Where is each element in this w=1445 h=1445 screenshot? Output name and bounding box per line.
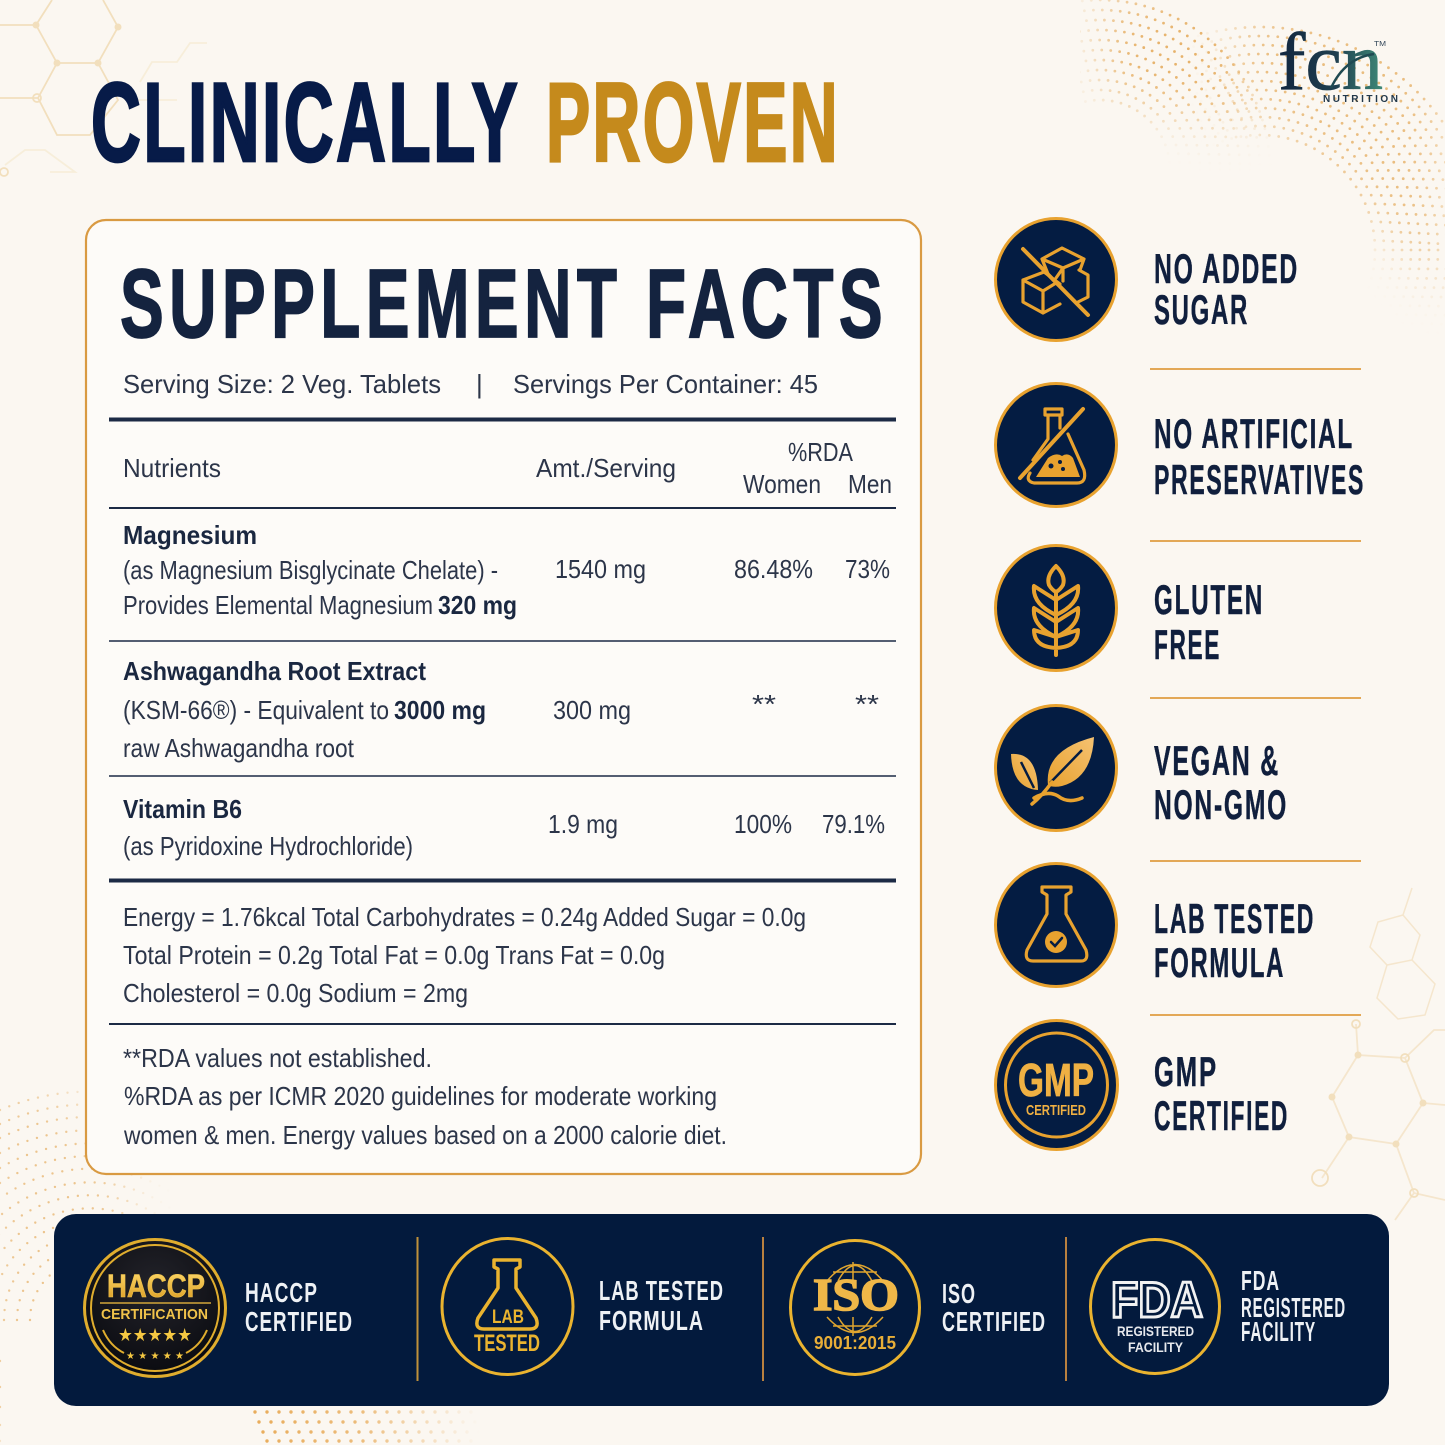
table header: Amt./Serving xyxy=(536,453,676,483)
row: magnesium: 1540 mg xyxy=(555,554,646,584)
row: magnesium xyxy=(123,520,890,620)
label: lab tested formula xyxy=(599,1275,724,1336)
row: vitamin b6: 1.9 mg xyxy=(548,809,618,839)
row: magnesium: 320 mg xyxy=(438,590,517,620)
badge: iso 9001:2015: ISO xyxy=(813,1269,899,1320)
label: no artificial preservatives xyxy=(1154,410,1365,503)
nutrition values: Total Protein = 0.2g Total Fat = 0.0g Trans Fat = 0.0g xyxy=(123,940,665,970)
badge: fda registered facility: FACILITY xyxy=(1128,1339,1184,1355)
label: vegan and non-gmo: NON-GMO xyxy=(1154,781,1288,828)
label: iso certified: ISO xyxy=(942,1278,976,1309)
row: ashwagandha xyxy=(123,656,879,763)
title: PROVEN xyxy=(546,60,840,185)
table header: %RDA xyxy=(788,437,854,467)
badge: haccp certification: ★★★★★ xyxy=(126,1351,184,1362)
label: lab tested formula: FORMULA xyxy=(599,1305,704,1336)
nutrition values: Cholesterol = 0.0g Sodium = 2mg xyxy=(123,978,468,1008)
row: vitamin b6: Vitamin B6 xyxy=(123,794,242,824)
heading: supplement facts: SUPPLEMENT FACTS xyxy=(120,249,888,358)
nutrition values: Energy = 1.76kcal Total Carbohydrates = 0.24g Added Sugar = 0.0g xyxy=(123,902,806,932)
footnotes xyxy=(123,1043,727,1150)
badge: haccp certification: HACCP xyxy=(107,1268,205,1304)
icon: gluten free xyxy=(996,546,1116,670)
row: ashwagandha: (KSM-66®) - Equivalent to xyxy=(123,695,389,725)
label: gluten free: FREE xyxy=(1154,621,1221,668)
badge: lab tested xyxy=(442,1238,573,1374)
panel: supplement facts xyxy=(86,220,921,1174)
label: lab tested formula: FORMULA xyxy=(1154,939,1285,986)
label: fda registered facility: FACILITY xyxy=(1241,1316,1316,1347)
table header: Nutrients xyxy=(123,453,221,483)
row: ashwagandha: 300 mg xyxy=(553,695,631,725)
label: fda registered facility: FDA xyxy=(1241,1265,1280,1296)
table header: Women xyxy=(743,469,821,499)
badge: iso 9001:2015 xyxy=(790,1240,920,1374)
icon: gmp certified: CERTIFIED xyxy=(1026,1102,1086,1119)
nutrition values xyxy=(123,902,806,1008)
footnotes: **RDA values not established. xyxy=(123,1043,432,1073)
label: gluten free xyxy=(1154,576,1264,668)
label: no added sugar xyxy=(1154,245,1299,333)
row: ashwagandha: 3000 mg xyxy=(394,695,486,725)
icon: lab tested formula xyxy=(996,864,1116,986)
icon: gmp certified xyxy=(996,1020,1118,1150)
badge: haccp certification: ★★★★★ xyxy=(118,1325,192,1345)
label: gluten free: GLUTEN xyxy=(1154,576,1264,623)
label: fda registered facility xyxy=(1241,1265,1346,1347)
label: no added sugar: NO ADDED xyxy=(1154,245,1299,292)
row: magnesium: Provides Elemental Magnesium xyxy=(123,590,433,620)
label: haccp certified: CERTIFIED xyxy=(245,1306,353,1337)
icon: vegan and non-gmo xyxy=(996,706,1116,830)
badge: fda registered facility xyxy=(1090,1240,1220,1374)
footnotes: women & men. Energy values based on a 2000 calorie diet. xyxy=(123,1120,727,1150)
footnotes: %RDA as per ICMR 2020 guidelines for moderate working xyxy=(124,1081,717,1111)
table header: Men xyxy=(848,469,892,499)
row: ashwagandha: Ashwagandha Root Extract xyxy=(123,656,426,686)
label: lab tested formula xyxy=(1154,895,1315,986)
label: haccp certified xyxy=(245,1277,353,1337)
icon: gmp certified: GMP xyxy=(1018,1054,1094,1106)
label: gmp certified xyxy=(1154,1048,1289,1139)
row: ashwagandha: raw Ashwagandha root xyxy=(123,733,355,763)
label: vegan and non-gmo: VEGAN & xyxy=(1154,737,1280,784)
row: vitamin b6: 100% xyxy=(734,809,792,839)
icon: no artificial preservatives xyxy=(996,384,1116,506)
serving information: | xyxy=(476,369,483,399)
row: vitamin b6 xyxy=(123,794,885,861)
badge: lab tested: TESTED xyxy=(474,1330,540,1357)
label: no added sugar: SUGAR xyxy=(1154,286,1249,333)
row: vitamin b6: (as Pyridoxine Hydrochloride) xyxy=(123,831,413,861)
label: lab tested formula: LAB TESTED xyxy=(599,1275,724,1306)
panel: certification band xyxy=(54,1214,1389,1406)
label: iso certified: CERTIFIED xyxy=(942,1306,1046,1337)
label: iso certified xyxy=(942,1278,1046,1337)
title: CLINICALLY xyxy=(91,60,520,185)
label: gmp certified: CERTIFIED xyxy=(1154,1092,1289,1139)
row: vitamin b6: 79.1% xyxy=(822,809,885,839)
row: ashwagandha: ** xyxy=(752,689,776,719)
label: lab tested formula: LAB TESTED xyxy=(1154,895,1315,942)
badge: haccp certification: CERTIFICATION xyxy=(101,1306,208,1323)
row: magnesium: 73% xyxy=(845,554,890,584)
label: fda registered facility: REGISTERED xyxy=(1241,1292,1346,1323)
serving information xyxy=(123,369,818,399)
serving information: Serving Size: 2 Veg. Tablets xyxy=(123,369,441,399)
row: magnesium: Magnesium xyxy=(123,520,257,550)
row: magnesium: (as Magnesium Bisglycinate Chelate) - xyxy=(123,555,498,585)
label: haccp certified: HACCP xyxy=(245,1277,318,1308)
icon: no added sugar xyxy=(996,218,1116,340)
badge: fda registered facility: REGISTERED xyxy=(1117,1323,1194,1339)
row: ashwagandha: ** xyxy=(855,689,879,719)
logo: fcn nutrition: fcn xyxy=(1278,16,1383,107)
badge: fda registered facility: FDA xyxy=(1111,1272,1203,1328)
table header xyxy=(123,437,892,499)
logo: fcn nutrition: TM xyxy=(1374,41,1386,48)
row: magnesium: 86.48% xyxy=(734,554,813,584)
badge: lab tested: LAB xyxy=(492,1307,524,1328)
badge: haccp certification xyxy=(84,1240,226,1376)
serving information: Servings Per Container: 45 xyxy=(513,369,818,399)
label: gmp certified: GMP xyxy=(1154,1048,1218,1095)
badge: iso 9001:2015: 9001:2015 xyxy=(814,1333,896,1353)
logo: fcn nutrition: NUTRITION xyxy=(1323,94,1398,105)
label: vegan and non-gmo xyxy=(1154,737,1288,828)
